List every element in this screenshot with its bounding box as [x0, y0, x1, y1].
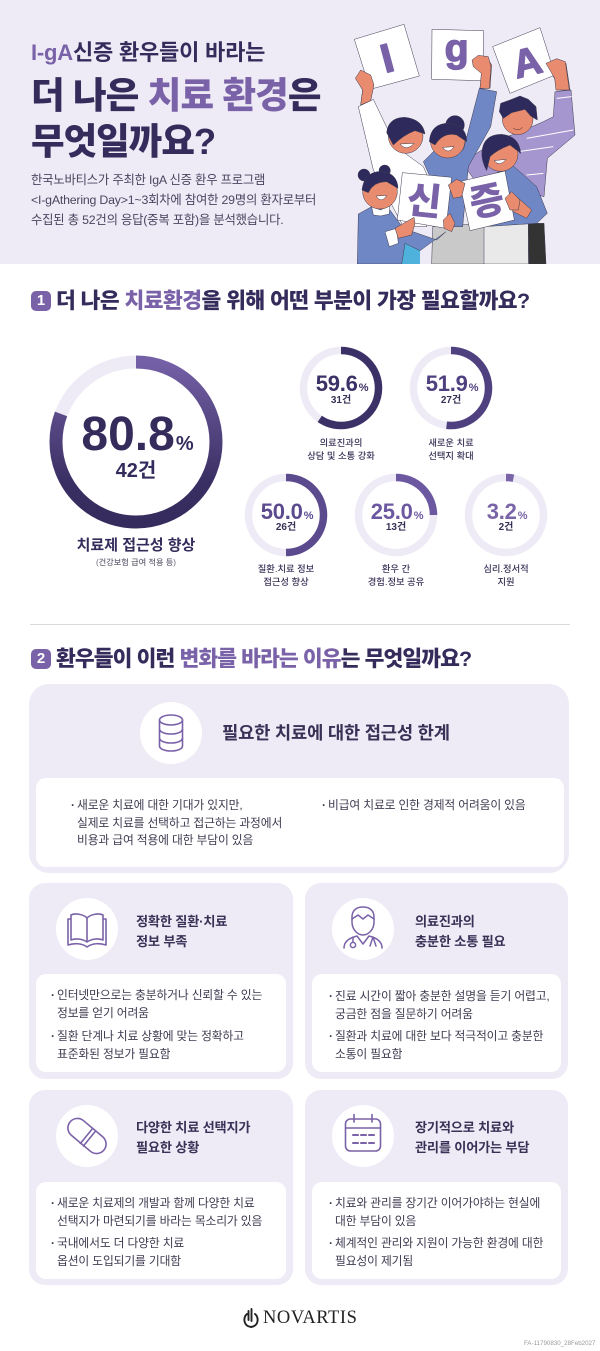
icon: capsule — [56, 1105, 118, 1167]
chart: 3.2% donut — [464, 474, 548, 556]
panel title: 다양한 치료 선택지가 — [136, 1120, 250, 1135]
sign: 증 — [459, 171, 514, 231]
bullet 2: 체계적인 관리와 지원이 가능한 환경에 대한 — [335, 1236, 543, 1250]
white text box — [312, 1182, 561, 1279]
stat: 13건: 13건 — [386, 522, 406, 533]
bullet 2: 질환과 치료에 대한 보다 적극적이고 충분한 — [335, 1029, 543, 1043]
bullet: 경제적 어려움: 비급여 치료로 인한 경제적 어려움이 있음 — [328, 798, 526, 812]
bullet 1: 치료와 관리를 장기간 이어가야하는 현실에 — [335, 1196, 540, 1210]
panel: 장기적으로 치료와 관리를 이어가는 부담 — [305, 1090, 568, 1285]
bullet 1: 궁금한 점을 질문하기 어려움 — [335, 1007, 473, 1021]
white text box — [36, 1182, 286, 1279]
panel title — [136, 1120, 250, 1154]
white text box: · — [51, 1029, 55, 1043]
person: girl front — [357, 165, 446, 264]
panel: 의료진과의 충분한 소통 필요 — [305, 883, 568, 1079]
heading: main title line 1: 더 나은 치료 환경은 — [31, 75, 321, 116]
chart: 51.9% donut — [410, 346, 492, 430]
chart: 59.6% donut — [300, 346, 382, 430]
stat: 2건: 2건 — [499, 522, 513, 533]
white text box: · — [71, 798, 75, 812]
heading: main title line 2: 무엇일까요? — [31, 121, 215, 162]
bullet 2 — [51, 1236, 184, 1268]
panel title: 의료진과의 — [415, 914, 475, 929]
panel: header background — [0, 0, 600, 264]
label: 심리.정서적 지원: 심리.정서적 — [483, 564, 529, 574]
icon: open book — [56, 898, 118, 960]
label: 심리.정서적 지원: 지원 — [497, 577, 515, 587]
sign: I — [354, 24, 419, 89]
bullet 1: 새로운 치료제의 개발과 함께 다양한 치료 — [57, 1196, 255, 1210]
label: 의료진과의 상담 및 소통 강화: 상담 및 소통 강화 — [307, 451, 375, 461]
chart: 50.0% donut — [244, 474, 328, 556]
panel title — [136, 914, 227, 948]
panel title: 필요한 치료에 대한 접근성 한계 — [222, 723, 450, 743]
white text box: · — [329, 989, 333, 1003]
bullet 2: 표준화된 정보가 필요함 — [57, 1047, 170, 1061]
bullet 2 — [329, 1029, 544, 1061]
text block: intro — [31, 173, 316, 227]
label: 새로운 치료 선택지 확대 — [428, 438, 474, 461]
bullet 1: 정보를 얻기 어려움 — [57, 1006, 149, 1020]
bullet: 기대와 부담: 실제로 치료를 선택하고 접근하는 과정에서 — [77, 816, 282, 830]
label: 질환.치료 정보 접근성 향상: 질환.치료 정보 — [258, 564, 314, 574]
panel title: 필요한 상황 — [136, 1140, 199, 1154]
chart: 25.0% donut — [354, 474, 438, 556]
label: 치료제 접근성 향상: 치료제 접근성 향상 — [77, 537, 195, 554]
hands over signs — [355, 55, 569, 238]
sign: A: A — [508, 38, 546, 87]
bullet 1: 선택지가 마련되기를 바라는 목소리가 있음 — [57, 1214, 262, 1228]
panel title: 정확한 질환·치료 — [136, 914, 227, 929]
bullet 1 — [329, 989, 550, 1021]
icon: calendar — [332, 1105, 394, 1167]
panel title — [415, 1120, 530, 1154]
panel: 다양한 치료 선택지가 필요한 상황 — [29, 1090, 293, 1285]
bullet 2 — [329, 1236, 544, 1268]
white text box — [36, 778, 564, 867]
heading: section 2: 2 — [37, 650, 45, 667]
heading: section 2: 환우들이 이런 변화를 바라는 이유는 무엇일까요? — [56, 647, 471, 671]
panel: 정확한 질환·치료 정보 부족 — [29, 883, 293, 1079]
bullet 2: 질환 단계나 치료 상황에 맞는 정확하고 — [57, 1029, 244, 1043]
sign: I: I — [376, 36, 398, 82]
bullet 1 — [329, 1196, 540, 1228]
heading: section 1: 1 — [37, 292, 45, 309]
white text box — [36, 974, 286, 1072]
sign: 신: 신 — [405, 178, 444, 224]
text block: intro: 수집된 총 52건의 응답(중복 포함)을 분석했습니다. — [31, 213, 284, 227]
panel: 필요한 치료에 대한 접근성 한계 — [29, 684, 569, 873]
stat: 50.0%: 50.0% — [261, 499, 313, 524]
label: 환우 간 경험.정보 공유 — [368, 564, 424, 587]
panel title — [415, 914, 506, 948]
sign: g — [432, 27, 484, 81]
person: blue hoodie — [423, 56, 497, 227]
icon: database — [140, 702, 202, 764]
stat: 31건: 31건 — [331, 395, 351, 406]
stat: 51.9%: 51.9% — [426, 371, 478, 396]
stat: 27건: 27건 — [441, 395, 461, 406]
label: 환우 간 경험.정보 공유: 환우 간 — [382, 564, 410, 574]
bullet 1: 인터넷만으로는 충분하거나 신뢰할 수 있는 — [57, 988, 262, 1002]
white text box: · — [322, 798, 326, 812]
sign: A — [493, 28, 555, 93]
pants — [400, 223, 546, 264]
stat: 59.6%: 59.6% — [316, 371, 368, 396]
bullet 1 — [51, 1196, 262, 1228]
person: striped sweater — [467, 59, 575, 197]
text: document code: FA-11790830_28Feb2027 — [524, 1340, 595, 1347]
sign: 증: 증 — [466, 177, 508, 225]
label: 심리.정서적 지원 — [483, 564, 529, 587]
stat: 80.8%: 80.8% — [81, 408, 194, 461]
bullet 1: 대한 부담이 있음 — [335, 1214, 416, 1228]
label: 의료진과의 상담 및 소통 강화 — [307, 438, 375, 461]
logo: Novartis — [243, 1308, 357, 1328]
label: note: (건강보험 급여 적용 등) — [96, 558, 176, 567]
label: 새로운 치료 선택지 확대: 새로운 치료 — [428, 438, 474, 448]
bullet: 기대와 부담: 새로운 치료에 대한 기대가 있지만, — [77, 798, 242, 812]
label: 의료진과의 상담 및 소통 강화: 의료진과의 — [320, 438, 362, 448]
panel title: 장기적으로 치료와 — [415, 1120, 514, 1135]
bullet 1: 진료 시간이 짧아 충분한 설명을 듣기 어렵고, — [335, 989, 550, 1003]
stat: 25.0%: 25.0% — [371, 499, 423, 524]
icon: Novartis flame — [243, 1308, 259, 1328]
stat: 26건: 26건 — [276, 522, 296, 533]
label: 새로운 치료 선택지 확대: 선택지 확대 — [428, 451, 474, 461]
chart: 80.8% donut — [50, 356, 222, 528]
label: 질환.치료 정보 접근성 향상: 접근성 향상 — [263, 577, 309, 587]
bullet 2: 필요성이 제기됨 — [335, 1254, 413, 1268]
bullet: 기대와 부담 — [71, 798, 282, 847]
white text box: · — [329, 1029, 333, 1043]
sign: g: g — [445, 27, 469, 71]
label: 질환.치료 정보 접근성 향상 — [258, 564, 314, 587]
white text box: · — [51, 1196, 55, 1210]
white text box — [312, 974, 561, 1072]
person: blue shirt front — [473, 134, 547, 227]
panel title: 정보 부족 — [136, 934, 187, 948]
white text box: · — [51, 1236, 55, 1250]
panel title: 관리를 이어가는 부담 — [415, 1140, 529, 1154]
text block: intro: <I-gAthering Day>1~3회차에 참여한 29명의 환자로부터 — [31, 193, 316, 207]
bullet 2 — [51, 1029, 244, 1061]
panel title: 충분한 소통 필요 — [415, 934, 505, 948]
stat: 3.2%: 3.2% — [487, 499, 527, 524]
heading: section 1: 더 나은 치료환경을 위해 어떤 부분이 가장 필요할까요? — [56, 289, 530, 313]
heading: subtitle: I-gA신증 환우들이 바라는 — [31, 40, 265, 65]
bullet 1 — [51, 988, 262, 1020]
bullet 2: 옵션이 도입되기를 기대함 — [57, 1254, 181, 1268]
text block: intro: 한국노바티스가 주최한 IgA 신증 환우 프로그램 — [31, 173, 265, 187]
wordmark: NOVARTIS — [263, 1308, 357, 1328]
label: 환우 간 경험.정보 공유: 경험.정보 공유 — [368, 577, 424, 587]
bullet 2: 소통이 필요함 — [335, 1047, 402, 1061]
white text box: · — [51, 988, 55, 1002]
bullet: 기대와 부담: 비용과 급여 적용에 대한 부담이 있음 — [77, 833, 253, 847]
person: white shirt — [356, 71, 429, 227]
icon: doctor — [332, 898, 394, 960]
bullet 2: 국내에서도 더 다양한 치료 — [57, 1236, 184, 1250]
white text box: · — [329, 1196, 333, 1210]
sign: 신 — [397, 173, 452, 228]
stat: 42건: 42건 — [116, 460, 156, 482]
white text box: · — [329, 1236, 333, 1250]
illustration: patients holding signs — [354, 24, 576, 264]
